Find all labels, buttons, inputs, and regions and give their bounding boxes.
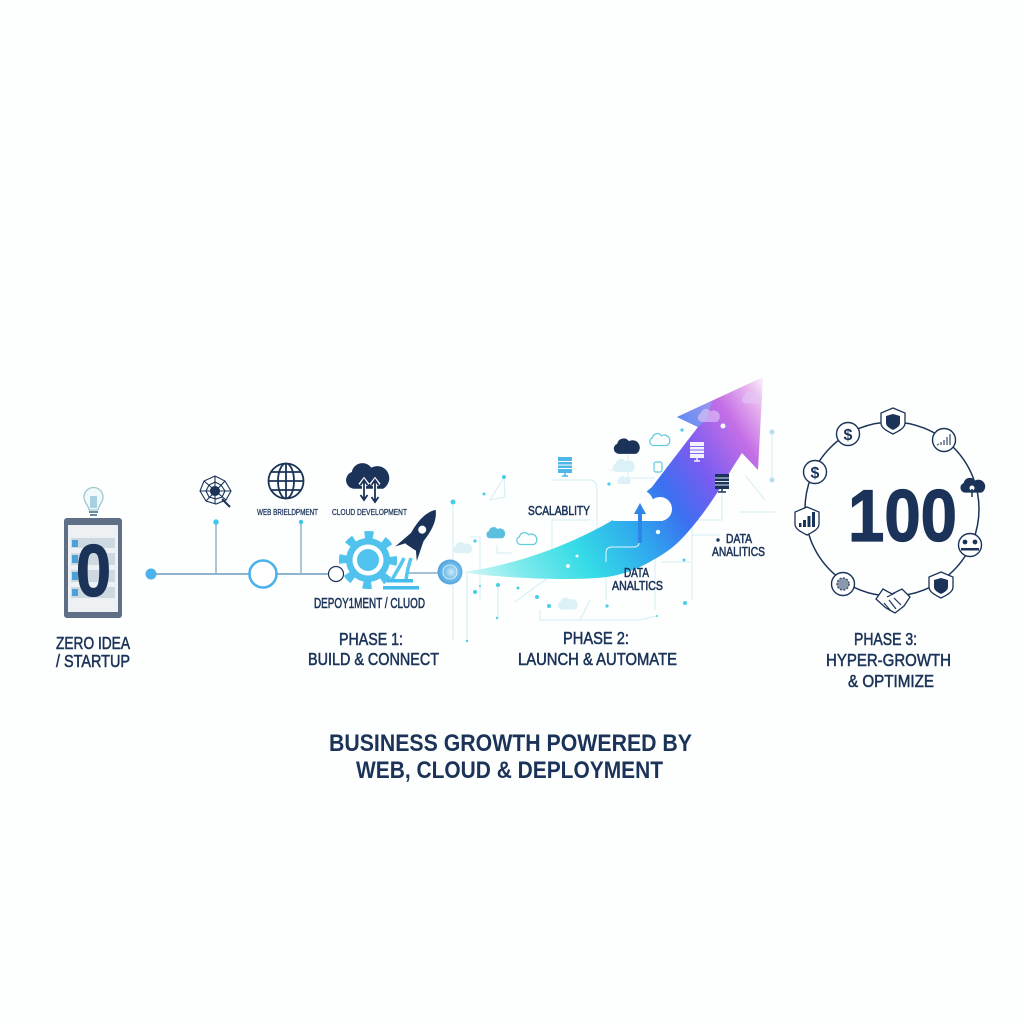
title: WEB, CLOUD & DEPLOYMENT	[356, 757, 663, 784]
icon: dollar coin upper	[836, 422, 860, 446]
label: zero idea: / STARTUP	[56, 651, 130, 671]
heading: phase 2	[518, 628, 677, 669]
icon: spider web with cursor	[200, 476, 231, 507]
icon: dark cloud	[614, 438, 640, 454]
icon: outline cloud left	[517, 533, 537, 544]
heading: phase 3: & OPTIMIZE	[848, 671, 934, 691]
icon: cloud with up and down arrows	[346, 463, 389, 502]
label: deployment / cloud: DEPOY1MENT / CLUOD	[314, 596, 425, 612]
title	[329, 730, 692, 784]
growth arrow	[463, 377, 763, 579]
icon: white server on arrow	[690, 442, 704, 461]
heading: phase 3: PHASE 3:	[854, 629, 917, 649]
heading: phase 1: BUILD & CONNECT	[308, 649, 439, 669]
panel: phase 1 build and connect	[146, 463, 446, 669]
heading: phase 3	[826, 629, 951, 691]
label: data analytics right: ANALITICS	[712, 545, 765, 559]
icon: people badge	[958, 534, 982, 556]
icon: white cloud cutout on arrow	[613, 489, 672, 521]
icon: gear	[340, 532, 396, 588]
label: data analytics right: DATA	[726, 532, 753, 546]
icon: clouds inside arrowhead	[698, 392, 762, 422]
icon: blue server	[558, 457, 572, 476]
icon: rocket	[395, 503, 446, 561]
glowing hub node	[438, 560, 462, 584]
icon: dark server	[715, 474, 729, 492]
heading: phase 1: PHASE 1:	[339, 629, 403, 649]
network backdrop: pale circuit lines and nodes	[453, 432, 775, 641]
icon: dollar coin lower	[804, 460, 826, 484]
icon: shield with bars	[795, 507, 819, 535]
icon: light bulb	[84, 488, 103, 516]
number zero: 0	[76, 531, 111, 612]
icon: outline cloud top	[650, 434, 670, 446]
icon: handshake	[876, 589, 910, 613]
label: data analytics right	[712, 532, 765, 559]
icon: cloud badge	[960, 478, 985, 497]
icon: shield top	[881, 408, 905, 434]
icon: dollar coin upper: $	[844, 427, 853, 444]
panel: phase 2 launch and automate	[438, 377, 765, 669]
heading: phase 1	[308, 629, 439, 669]
network node dots	[450, 428, 687, 642]
label: zero idea	[56, 633, 130, 671]
label: zero idea: ZERO IDEA	[56, 633, 130, 653]
heading: phase 2: LAUNCH & AUTOMATE	[518, 649, 677, 669]
heading: phase 3: HYPER-GROWTH	[826, 650, 951, 670]
icon: globe	[268, 464, 304, 498]
panel: zero idea / startup	[56, 488, 130, 671]
side marker dots near arrowhead	[770, 430, 774, 482]
label: cloud development: CLOUD DEVELOPMENT	[332, 507, 407, 517]
number 100: 100	[848, 476, 957, 557]
icon: dollar coin lower: $	[811, 465, 820, 482]
label: data analytics centre	[612, 566, 663, 593]
icon: blue up arrow	[634, 503, 646, 543]
icon: tablet with wireframe	[64, 518, 122, 618]
icon: shield lower right	[929, 572, 953, 598]
icon: device outline	[654, 462, 662, 472]
icon: growth chart badge	[932, 428, 956, 452]
icon: launch pad	[383, 558, 419, 590]
label: scalability: SCALABLITY	[528, 504, 591, 518]
icon: gear badge	[832, 572, 854, 596]
label: data analytics centre: DATA	[624, 566, 650, 580]
arrow sparkle dots	[566, 424, 726, 568]
label: web development: WEB BRIELDPMENT	[257, 507, 318, 517]
heading: phase 2: PHASE 2:	[563, 628, 629, 648]
timeline with nodes	[146, 519, 440, 588]
panel: phase 3 hyper-growth	[795, 408, 985, 691]
icon: blue cloud	[486, 527, 505, 538]
label: data analytics centre: ANALTICS	[612, 579, 663, 593]
pale cloud cluster	[453, 459, 635, 610]
connector from up arrow	[606, 543, 639, 562]
title: BUSINESS GROWTH POWERED BY	[329, 730, 692, 757]
ring	[805, 422, 979, 596]
